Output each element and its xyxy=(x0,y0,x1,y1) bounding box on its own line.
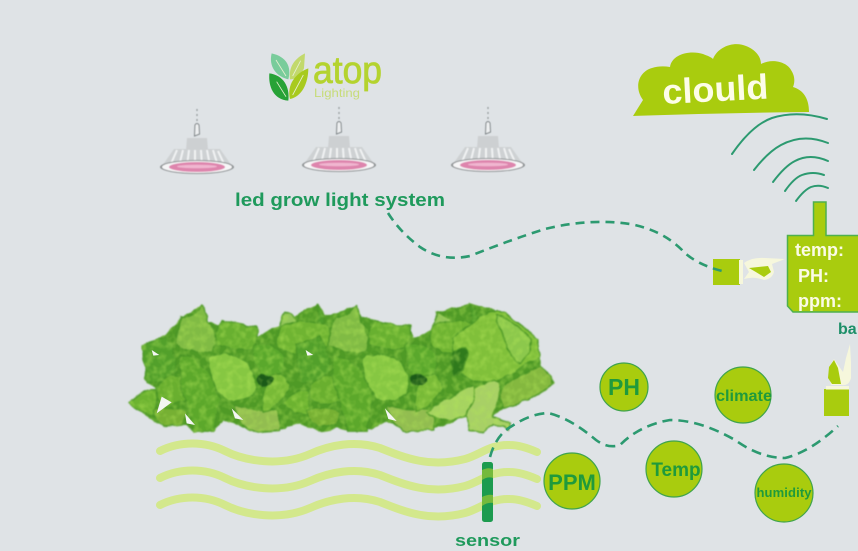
device body xyxy=(788,202,858,312)
bubble: humidity xyxy=(755,464,813,522)
cloud xyxy=(633,44,809,116)
water waves xyxy=(160,444,537,517)
lettuce row xyxy=(128,303,553,432)
heading: led grow light system: led grow light system xyxy=(235,190,445,210)
label: sensor: sensor xyxy=(455,532,521,550)
logo: atop Lighting xyxy=(269,50,382,101)
icon: pointing hand up xyxy=(824,344,851,416)
lettuce leaves xyxy=(128,303,553,432)
bubble: humidity: humidity xyxy=(756,485,812,500)
logo wordmark: atop xyxy=(313,50,382,92)
cloud shape xyxy=(633,44,809,116)
upper dashed connection line xyxy=(388,213,722,271)
bubble: Temp xyxy=(646,441,702,497)
bubble: climate: climate xyxy=(716,388,772,405)
data device panel xyxy=(788,202,858,312)
bubble: PH xyxy=(600,363,648,411)
bubble: PPM: PPM xyxy=(548,470,596,495)
lamp 1 xyxy=(160,109,234,174)
cloud label: clould xyxy=(661,67,769,112)
bubble: climate xyxy=(715,367,772,423)
temp label: temp: xyxy=(795,240,844,260)
lower dashed connection line xyxy=(490,413,838,458)
bubble: Temp: Temp xyxy=(651,460,701,481)
bubble: PH: PH xyxy=(608,374,640,400)
bubble: PPM xyxy=(544,453,600,509)
lamp 2 xyxy=(302,107,376,172)
logo tagline: Lighting xyxy=(314,86,360,100)
lamp 3 xyxy=(451,107,525,172)
wifi signal arcs xyxy=(732,114,828,201)
PH label: PH: xyxy=(798,266,829,286)
label: clipped ba: ba xyxy=(838,321,857,338)
lettuce light gaps xyxy=(152,350,397,425)
ppm label: ppm: xyxy=(798,291,842,311)
icon: pointing hand right xyxy=(713,258,785,285)
icon: logo leaves xyxy=(269,53,308,101)
sensor probe xyxy=(482,462,493,522)
